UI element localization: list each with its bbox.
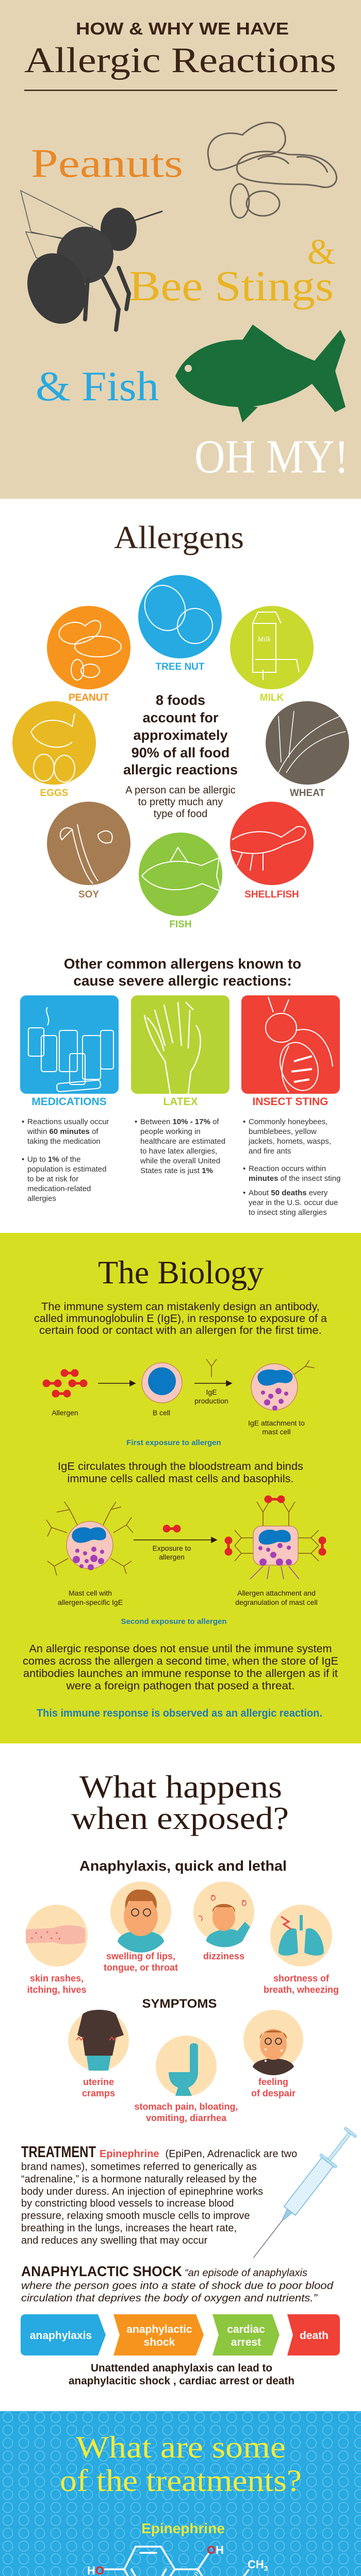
chart: epinephrine molecule: OH	[207, 2544, 224, 2556]
heading: other allergens: cause severe allergic reactions:	[73, 973, 292, 989]
labels: first exposure	[52, 1388, 305, 1436]
text: anaphylactic shock: circulation that deprives the body of oxygen and nutrients.”	[21, 2293, 318, 2304]
bullets: medications: Reactions usually occur	[27, 1117, 109, 1126]
caption: first exposure: First exposure to allergen	[126, 1438, 221, 1447]
subheading: epinephrine: Epinephrine	[141, 2520, 225, 2536]
illustration: bee	[18, 191, 162, 332]
text: allergic response: comes across the allergen a second time, when the store of IgE	[23, 1655, 338, 1667]
card: medications	[20, 995, 119, 1203]
bullets: latex: healthcare are estimated	[140, 1137, 225, 1146]
panel: what happens when exposed	[21, 1770, 359, 2387]
bullets: insect sting: Commonly honeybees,	[249, 1117, 327, 1126]
text: treatment: breathing in the lungs, increases the heart rate,	[21, 2223, 237, 2234]
text: anaphylactic shock: where the person goes into a state of shock due to poor blood	[21, 2280, 334, 2292]
caption: second exposure: Second exposure to allergen	[121, 1617, 227, 1626]
labels: symptoms row 1: itching, hives	[27, 1985, 87, 1995]
icon: tree nut	[138, 575, 222, 658]
bullets: insect sting: bumblebees, yellow	[249, 1127, 317, 1136]
labels: symptoms row 2: vomiting, diarrhea	[146, 2113, 227, 2123]
labels: symptoms row 2: cramps	[82, 2088, 115, 2098]
bullets: insect sting: to insect sting allergies	[249, 1208, 327, 1217]
panel: treatments	[0, 2411, 361, 2576]
text: treatment	[21, 2143, 297, 2246]
labels: first exposure: IgE attachment to	[248, 1419, 305, 1427]
bullets: insect sting: •	[243, 1164, 245, 1173]
labels: symptoms row 2	[82, 2077, 296, 2123]
text: treatment: “adrenaline,” is a hormone naturally released by the	[21, 2174, 257, 2185]
heading: & Fish: & Fish	[36, 363, 159, 410]
bullets: medications: allergies	[27, 1194, 56, 1203]
chart: epinephrine molecule: 3	[264, 2564, 268, 2572]
bullets: latex: Between 10% - 17% of	[140, 1117, 219, 1126]
text: any food: to pretty much any	[138, 796, 223, 808]
chevron: cardiac arrest: cardiac	[227, 2324, 265, 2335]
bullets: insect sting: •	[243, 1117, 245, 1126]
icon: despair	[243, 2010, 303, 2075]
illustration: peanuts	[208, 123, 337, 218]
icon: toilet	[156, 2036, 217, 2096]
labels: first exposure: IgE	[206, 1388, 217, 1396]
bullets: insect sting: and fire ants	[249, 1147, 291, 1156]
text: IgE circulates: immune cells called mast cells and basophils.	[67, 1473, 294, 1485]
chevron: anaphylactic shock	[113, 2314, 204, 2355]
bullets: insect sting: Reaction occurs within	[249, 1164, 326, 1173]
chevron: anaphylaxis: anaphylaxis	[30, 2330, 92, 2342]
labels: symptoms row 1: swelling of lips,	[106, 1951, 175, 1961]
panel: allergens	[12, 520, 349, 930]
icon: lungs	[270, 1905, 332, 1967]
label: fish: FISH	[169, 919, 192, 930]
labels: second exposure: Mast cell with	[69, 1589, 112, 1597]
bullets: medications: medication-related	[27, 1184, 91, 1193]
heading: what happens: What happens	[79, 1770, 282, 1805]
label: milk: MILK	[260, 692, 284, 703]
text: 8 foods stat: allergic reactions	[123, 762, 238, 777]
label: latex: LATEX	[163, 1096, 198, 1108]
text: any food: A person can be allergic	[125, 785, 236, 796]
icon: allergen molecules	[44, 1370, 86, 1396]
bullets: latex: States rate is just 1%	[140, 1166, 213, 1175]
bullets: insect sting: minutes of the insect sting	[249, 1174, 340, 1183]
label: peanut: PEANUT	[69, 692, 109, 703]
icon: dizziness	[193, 1882, 254, 1947]
card: insect sting	[241, 995, 340, 1217]
labels: symptoms row 1: shortness of	[273, 1973, 330, 1984]
labels: symptoms row 2: feeling	[258, 2077, 288, 2087]
heading: Bee Stings: Bee Stings	[129, 262, 334, 310]
title: Allergic Reactions	[24, 41, 336, 80]
text: treatment: body under duress. An injection of epinephrine works	[21, 2186, 263, 2197]
text: IgE intro: called immunoglobulin E (IgE), in response to exposure of a	[34, 1313, 327, 1325]
chart: epinephrine molecule: CH	[248, 2558, 264, 2571]
arrow	[134, 1537, 217, 1543]
heading: other allergens: Other common allergens known to	[64, 956, 301, 972]
text: 8 foods stat: account for	[142, 710, 219, 725]
bullets: insect sting	[243, 1117, 340, 1217]
icon: eggs	[12, 701, 96, 785]
icon: B cell	[142, 1363, 182, 1403]
bullets: medications	[22, 1117, 109, 1203]
panel: the biology	[0, 1233, 361, 1743]
bullets: medications: to be at risk for	[27, 1175, 78, 1183]
chevron: anaphylaxis	[21, 2314, 106, 2355]
text: unattended anaphylaxis	[69, 2362, 294, 2387]
bullets: medications: population is estimated	[27, 1165, 106, 1174]
bullets: medications: Up to 1% of the	[27, 1155, 80, 1164]
icon: allergen	[164, 1526, 179, 1531]
icon: mast cell with IgE	[46, 1502, 133, 1575]
bullets: latex	[135, 1117, 225, 1175]
label: soy: SOY	[78, 889, 99, 900]
callout: allergic reaction: This immune response is observed as an allergic reaction.	[37, 1707, 322, 1719]
icon: skin rash	[26, 1905, 88, 1967]
heading: what happens	[71, 1770, 289, 1836]
chevron: cardiac arrest: arrest	[231, 2336, 261, 2348]
bullets: latex: to have latex allergies,	[140, 1147, 217, 1156]
labels: second exposure: Allergen attachment and	[237, 1589, 316, 1597]
bullets: latex: while the overall United	[140, 1157, 220, 1165]
heading: symptoms: SYMPTOMS	[142, 1997, 217, 2011]
arrow with IgE	[194, 1359, 232, 1386]
heading: treatments: of the treatments?	[60, 2464, 302, 2498]
labels: symptoms row 1: breath, wheezing	[264, 1985, 339, 1995]
heading: Allergens: Allergens	[114, 520, 244, 555]
icon: uterine cramps	[68, 2010, 129, 2071]
illustration: fish	[175, 325, 346, 422]
heading: treatments: What are some	[76, 2430, 286, 2464]
text: unattended anaphylaxis: anaphylacitic shock , cardiac arrest or death	[69, 2375, 294, 2387]
text: treatment: by constricting blood vessels to increase blood	[21, 2198, 234, 2209]
diagram: second exposure	[46, 1497, 325, 1626]
icon: milk	[230, 606, 314, 689]
chevron: anaphylactic shock: shock	[144, 2336, 175, 2348]
icon: peanut	[47, 606, 130, 689]
heading: Peanuts: Peanuts	[31, 141, 183, 185]
text: anaphylactic shock: ANAPHYLACTIC SHOCK	[21, 2263, 182, 2279]
icon: soy	[47, 802, 130, 885]
icon: wheat	[266, 701, 349, 785]
text: allergic response	[23, 1643, 338, 1692]
labels: symptoms row 1	[27, 1951, 339, 1995]
text: allergic response: An allergic response does not ensue until the immune system	[29, 1643, 332, 1655]
subheading: anaphylaxis: Anaphylaxis, quick and lethal	[79, 1858, 287, 1874]
text: treatment: TREATMENT	[21, 2143, 96, 2161]
icon: milk: Milk	[257, 636, 271, 643]
labels: symptoms row 2: stomach pain, bloating,	[134, 2102, 238, 2112]
text: 8 foods stat: 90% of all food	[132, 745, 229, 760]
label: medications: MEDICATIONS	[31, 1096, 107, 1108]
icon: degranulating mast cell	[226, 1497, 325, 1579]
chevron: death	[287, 2314, 340, 2355]
text: 8 foods stat: approximately	[133, 727, 228, 743]
bullets: insect sting: jackets, hornets, wasps,	[248, 1137, 331, 1146]
bullets: latex: •	[135, 1117, 137, 1126]
labels: first exposure: production	[194, 1397, 228, 1405]
labels: symptoms row 1: tongue, or throat	[104, 1962, 178, 1973]
bullets: latex: people working in	[140, 1127, 201, 1136]
text: 8 foods stat	[123, 692, 238, 777]
bullets: medications: •	[22, 1155, 24, 1164]
bullets: medications: taking the medication	[27, 1137, 101, 1146]
icon: fish	[139, 833, 222, 916]
heading: what happens: when exposed?	[71, 1801, 289, 1836]
labels: first exposure: B cell	[153, 1409, 170, 1417]
label: eggs: EGGS	[40, 788, 68, 799]
icon: swelling face	[110, 1882, 171, 1953]
icon: mast cell	[251, 1360, 315, 1411]
label: shellfish: SHELLFISH	[244, 889, 299, 900]
diagram: first exposure	[44, 1359, 315, 1447]
text: any food: type of food	[154, 808, 207, 820]
subtitle: HOW & WHY WE HAVE	[76, 19, 289, 38]
text: IgE circulates	[58, 1461, 303, 1485]
chart: epinephrine molecule	[87, 2544, 268, 2576]
text: IgE intro: The immune system can mistakenly design an antibody,	[41, 1301, 320, 1313]
arrow	[98, 1381, 135, 1386]
chevron: cardiac arrest	[212, 2314, 280, 2355]
text: IgE intro: certain food or contact with an allergen for the first time.	[39, 1325, 322, 1336]
labels: second exposure	[58, 1589, 318, 1606]
chevron: anaphylactic shock: anaphylactic	[126, 2324, 192, 2335]
label: insect sting: INSECT STING	[252, 1096, 329, 1108]
text: allergic response: antibodies launches an immune response to the allergen as if it	[23, 1668, 338, 1680]
labels: first exposure: Allergen	[52, 1409, 78, 1417]
labels: second exposure: allergen-specific IgE	[58, 1598, 123, 1606]
labels: first exposure: mast cell	[262, 1428, 291, 1436]
chevron: death: death	[300, 2330, 329, 2342]
icon: syringe	[245, 2125, 359, 2264]
label: tree nut: TREE NUT	[156, 662, 205, 672]
labels: symptoms row 2: uterine	[83, 2077, 114, 2087]
text: treatment: (EpiPen, Adrenaclick are two	[162, 2148, 297, 2160]
labels: second exposure: degranulation of mast cell	[235, 1598, 318, 1606]
panel: kraft header	[0, 0, 361, 499]
chevron flow	[21, 2314, 340, 2355]
bullets: insect sting: year in the U.S. occur due	[249, 1198, 338, 1207]
text: anaphylactic shock: “an episode of anaphylaxis	[185, 2267, 307, 2279]
text: anaphylactic shock	[21, 2263, 334, 2304]
panel: other allergens	[20, 956, 340, 1217]
text: treatment: pressure, relaxing smooth muscle cells to improve	[21, 2210, 250, 2222]
text: IgE intro	[34, 1301, 327, 1336]
label: exposure: allergen	[159, 1553, 185, 1561]
bullets: insect sting: •	[243, 1189, 245, 1197]
text: treatment: and reduces any swelling that may occur	[21, 2235, 208, 2246]
text: IgE circulates: IgE circulates through the bloodstream and binds	[58, 1461, 303, 1472]
heading: treatments	[60, 2430, 302, 2498]
label: wheat: WHEAT	[290, 788, 325, 799]
text: unattended anaphylaxis: Unattended anaphylaxis can lead to	[91, 2362, 272, 2374]
text: any food	[125, 785, 236, 820]
label: exposure	[153, 1544, 191, 1561]
heading: other allergens	[64, 956, 301, 989]
bullets: insect sting: About 50 deaths every	[249, 1189, 328, 1197]
labels: symptoms row 1: skin rashes,	[30, 1973, 84, 1984]
text: 8 foods stat: 8 foods	[156, 692, 205, 708]
labels: symptoms row 2: of despair	[251, 2088, 296, 2098]
heading: The Biology: The Biology	[98, 1254, 264, 1291]
labels: symptoms row 1: dizziness	[203, 1951, 244, 1961]
text: treatment: Epinephrine	[100, 2148, 159, 2160]
icon: shellfish	[230, 802, 314, 885]
label: exposure: Exposure to	[153, 1544, 191, 1552]
bullets: medications: •	[22, 1117, 24, 1126]
text: allergic response: were a foreign pathogen that posed a threat.	[65, 1680, 295, 1692]
card: latex	[131, 995, 229, 1175]
heading: ampersand: &	[307, 232, 335, 272]
bullets: medications: within 60 minutes of	[27, 1127, 99, 1136]
text: treatment: brand names), sometimes referred to generically as	[21, 2161, 257, 2173]
